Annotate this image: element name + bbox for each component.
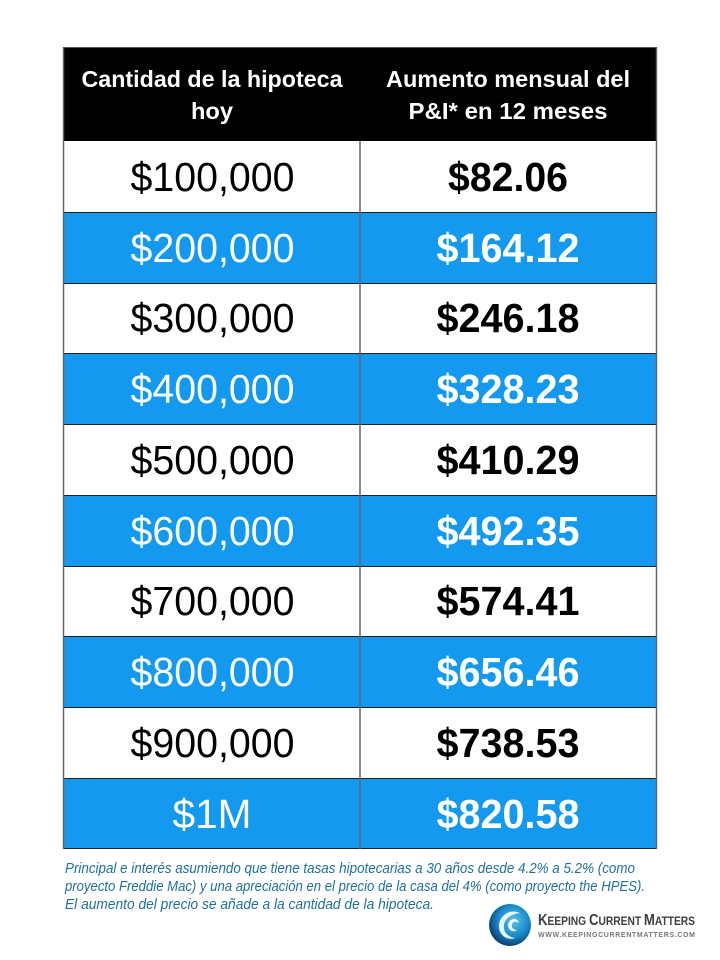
table — [63, 47, 657, 849]
column: monthly increases: $82.06 — [448, 154, 568, 200]
header: mortgage amount: hoy — [191, 98, 233, 124]
row backgrounds — [63, 141, 657, 849]
column: mortgage amounts: $500,000 — [130, 437, 294, 483]
column: mortgage amounts: $1M — [172, 791, 252, 837]
footnote — [64, 861, 645, 913]
table header — [63, 47, 657, 141]
column: mortgage amounts: $700,000 — [130, 578, 294, 624]
column: monthly increases — [436, 154, 580, 837]
column: mortgage amounts: $100,000 — [130, 154, 294, 200]
wordmark — [538, 912, 695, 939]
column: monthly increases: $164.12 — [436, 225, 580, 271]
column: mortgage amounts: $800,000 — [130, 649, 294, 695]
header: monthly increase — [386, 66, 630, 124]
header: monthly increase: P&I* en 12 meses — [408, 98, 608, 124]
column: mortgage amounts: $200,000 — [130, 225, 294, 271]
footnote: Principal e interés asumiendo que tiene tasas hipotecarias a 30 años desde 4.2% a 5.2% (como — [65, 861, 635, 877]
column: monthly increases: $328.23 — [436, 366, 580, 412]
column: mortgage amounts: $400,000 — [130, 366, 294, 412]
header: mortgage amount: Cantidad de la hipoteca — [82, 66, 343, 92]
column: monthly increases: $246.18 — [436, 295, 580, 341]
footnote: El aumento del precio se añade a la cantidad de la hipoteca. — [65, 897, 434, 913]
column: monthly increases: $410.29 — [436, 437, 580, 483]
column: mortgage amounts: $300,000 — [130, 295, 294, 341]
column: monthly increases: $738.53 — [436, 720, 580, 766]
column: monthly increases: $656.46 — [436, 649, 580, 695]
column: mortgage amounts — [130, 154, 294, 837]
column: monthly increases: $574.41 — [436, 578, 580, 624]
header: mortgage amount — [82, 66, 343, 124]
column: mortgage amounts: $600,000 — [130, 508, 294, 554]
header: monthly increase: Aumento mensual del — [386, 66, 630, 92]
footnote: proyecto Freddie Mac) y una apreciación en el precio de la casa del 4% (como proyecto the HPES). — [64, 879, 645, 895]
wordmark: KEEPING CURRENT MATTERS — [538, 912, 695, 929]
icon: swirl — [489, 904, 531, 946]
column: monthly increases: $492.35 — [436, 508, 580, 554]
column: monthly increases: $820.58 — [436, 791, 580, 837]
wordmark: WWW.KEEPINGCURRENTMATTERS.COM — [538, 932, 695, 939]
logo — [489, 904, 695, 946]
column: mortgage amounts: $900,000 — [130, 720, 294, 766]
